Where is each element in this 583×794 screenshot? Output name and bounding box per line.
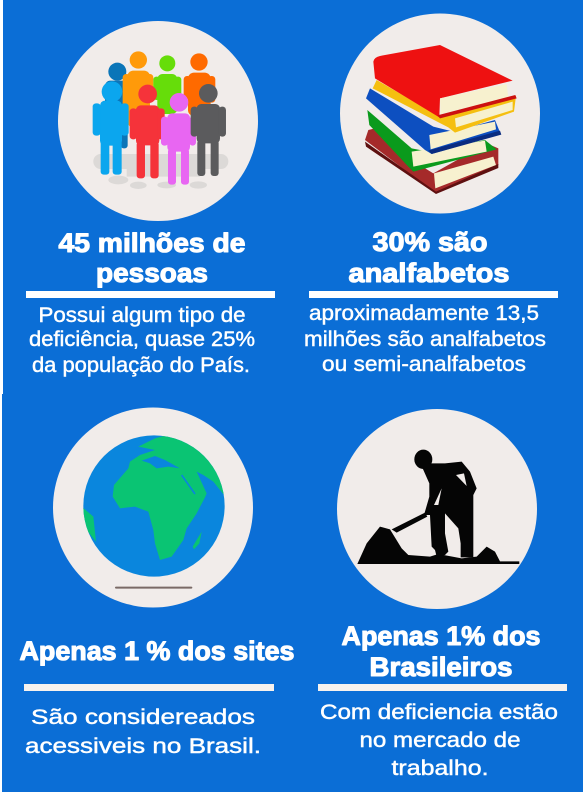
panel: pessoas <box>26 21 275 377</box>
heading: Apenas 1 % dos sites <box>20 636 294 666</box>
text block: no mercado de <box>360 729 520 752</box>
divider <box>309 291 558 298</box>
heading <box>342 621 540 682</box>
text block: São considereados <box>31 706 255 729</box>
divider <box>318 684 567 691</box>
heading <box>58 228 246 288</box>
heading: pessoas <box>96 258 208 288</box>
panel: sites <box>20 408 294 758</box>
icon: worker shoveling <box>337 409 537 609</box>
text block: ou semi-analfabetos <box>322 353 526 376</box>
panel: brasileiros <box>318 409 567 780</box>
heading: Apenas 1% dos <box>342 621 540 651</box>
text block: aproximadamente 13,5 <box>309 302 539 325</box>
text block <box>320 701 558 780</box>
icon: globe <box>53 408 253 608</box>
heading: 30% são <box>372 227 488 257</box>
heading: Brasileiros <box>370 652 512 682</box>
divider <box>26 291 275 298</box>
text block: milhões são analfabetos <box>304 328 546 351</box>
icon: stack of books <box>340 14 540 214</box>
text block: acessiveis no Brasil. <box>25 735 261 758</box>
panel: analfabetos <box>304 14 558 376</box>
heading <box>348 227 510 288</box>
text block <box>29 304 255 377</box>
text block <box>304 302 546 376</box>
heading: 45 milhões de <box>58 228 246 258</box>
text block: da população do País. <box>32 354 250 377</box>
text block <box>25 706 261 758</box>
text block: trabalho. <box>392 757 488 780</box>
text block: deficiência, quase 25% <box>29 328 255 351</box>
heading: analfabetos <box>348 258 510 288</box>
divider <box>24 684 274 691</box>
icon: group of people <box>58 21 258 221</box>
text block: Possui algum tipo de <box>38 304 246 327</box>
text block: Com deficiencia estão <box>320 701 558 724</box>
